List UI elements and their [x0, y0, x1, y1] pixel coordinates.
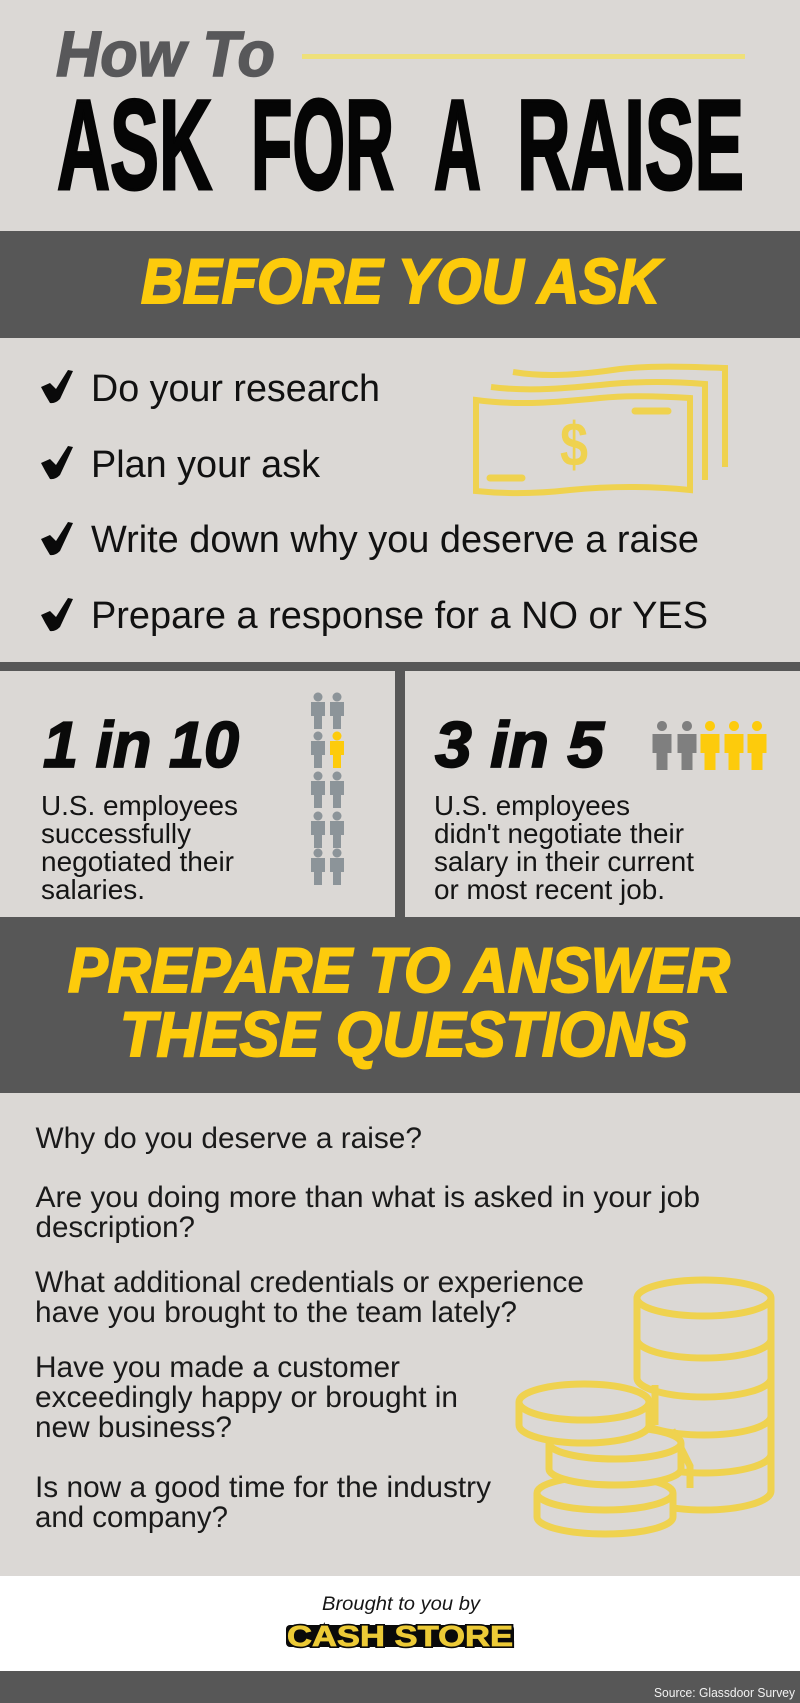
title: Ask for a raise: ASK	[57, 74, 212, 217]
icon: five people, three highlighted	[652, 721, 766, 770]
stat description: U.S. employees	[41, 790, 238, 821]
stat description	[434, 790, 694, 905]
checklist item: prepare response: Prepare a response for a NO or YES	[91, 594, 708, 636]
source note: Source: Glassdoor Survey	[654, 1686, 796, 1700]
heading: prepare to answer these questions: PREPARE TO ANSWER	[68, 936, 730, 1006]
icon: ten people, one highlighted	[311, 692, 344, 885]
stat description: U.S. employees	[434, 790, 630, 821]
stat number: 3 in 5: 3 in 5	[435, 708, 605, 781]
question 2: description?	[36, 1211, 195, 1244]
stat description: didn't negotiate their	[434, 818, 684, 849]
header panel	[0, 0, 800, 231]
title: Ask for a raise: A	[434, 74, 481, 217]
heading: before you ask: BEFORE YOU ASK	[141, 247, 664, 317]
question 5: and company?	[35, 1501, 228, 1534]
stat number: 1 in 10: 1 in 10	[43, 708, 239, 781]
footer: sponsor area	[0, 1576, 800, 1671]
panel: checklist	[41, 367, 708, 636]
checklist item: research: Do your research	[91, 367, 380, 409]
question 5: Is now a good time for the industry	[35, 1471, 491, 1504]
dividers between sections	[0, 662, 800, 921]
question 3: have you brought to the team lately?	[35, 1296, 517, 1329]
panel: 3 in 5 stat	[434, 708, 766, 905]
yellow title rule	[302, 54, 745, 59]
question 2	[36, 1181, 700, 1244]
stat description: salaries.	[41, 874, 145, 905]
stat description: successfully	[41, 818, 191, 849]
panel: questions	[35, 1122, 700, 1534]
icon: stack of banknotes: $	[560, 411, 588, 480]
question 4: Have you made a customer	[35, 1351, 400, 1384]
title: How To: How To	[56, 18, 275, 90]
icon: stacks of coins	[519, 1280, 771, 1534]
panel: 1 in 10 stat	[41, 692, 344, 905]
text: brought to you by: Brought to you by	[322, 1594, 482, 1615]
question 3	[35, 1266, 584, 1329]
logo: Cash Store: CASH STORE	[287, 1621, 513, 1653]
question 4: new business?	[35, 1411, 232, 1444]
banner: prepare to answer these questions	[0, 917, 800, 1093]
title: Ask for a raise: FOR	[251, 74, 394, 217]
logo: Cash Store: CASH STORE	[287, 1621, 513, 1653]
stat description	[41, 790, 238, 905]
checklist item: plan: Plan your ask	[91, 443, 320, 485]
icon: stack of banknotes	[476, 367, 725, 493]
question 3: What additional credentials or experience	[35, 1266, 584, 1299]
footer: source bar	[0, 1671, 800, 1703]
heading: prepare to answer these questions	[68, 936, 730, 1070]
heading: prepare to answer these questions: THESE QUESTIONS	[120, 1000, 688, 1070]
stat description: salary in their current	[434, 846, 694, 877]
question 1: Why do you deserve a raise?	[36, 1122, 422, 1155]
question 5	[35, 1471, 491, 1534]
title: Ask for a raise	[57, 74, 744, 217]
question 2: Are you doing more than what is asked in your job	[36, 1181, 700, 1214]
stat description: or most recent job.	[434, 874, 665, 905]
question 4: exceedingly happy or brought in	[35, 1381, 458, 1414]
question 4	[35, 1351, 458, 1444]
banner: before you ask	[0, 231, 800, 338]
stat description: negotiated their	[41, 846, 234, 877]
checklist item: write down: Write down why you deserve a raise	[91, 518, 699, 560]
